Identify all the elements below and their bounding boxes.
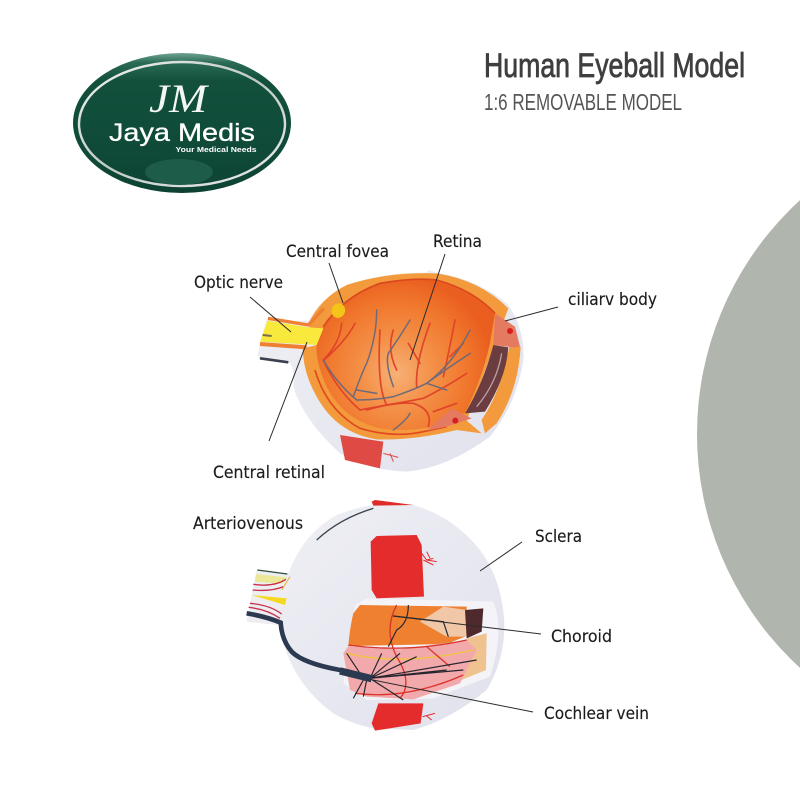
cochlear vein stem [340,671,372,679]
inferior muscle [372,703,423,731]
decorative grey circle [697,117,800,751]
label: Central retinal: Central retinal [213,463,325,482]
central fovea spot [329,301,347,320]
label: Cochlear vein: Cochlear vein [544,704,649,723]
retina pink layer [343,640,477,699]
vessels [323,310,470,430]
muscle patch [340,435,383,468]
vessels [347,605,477,700]
lens [465,345,508,413]
logo: Jaya Medis: Jaya Medis [109,119,255,147]
logo: Jaya Medis: JM [149,76,210,121]
label: Sclera: Sclera [535,527,582,546]
optic nerve [260,321,323,345]
illustration: eyeball outer view [247,500,504,731]
outer orange band [303,273,508,439]
subtitle: 1:6 REMOVABLE MODEL [484,89,682,115]
inner bowl [316,279,495,430]
white shell [257,270,523,472]
logo: Jaya Medis [73,53,291,193]
sclera [247,504,504,730]
label: Arteriovenous: Arteriovenous [193,514,303,533]
top muscle [372,500,413,506]
illustration: eyeball cross-section interior [257,270,523,472]
tan band [460,633,487,681]
superior muscle [371,535,424,598]
choroid [348,605,467,646]
logo: Jaya Medis: Your Medical Needs [176,145,256,154]
label: Optic nerve: Optic nerve [194,273,283,292]
label: Central fovea: Central fovea [286,242,389,261]
label: Retina: Retina [433,232,482,251]
label: Choroid: Choroid [551,627,612,646]
leader lines [250,254,558,712]
right wall [482,347,521,433]
ciliary body [493,313,520,347]
window recess [343,598,498,700]
nerve stripes [247,570,370,678]
label: ciliary body: ciliarv body [568,290,657,309]
